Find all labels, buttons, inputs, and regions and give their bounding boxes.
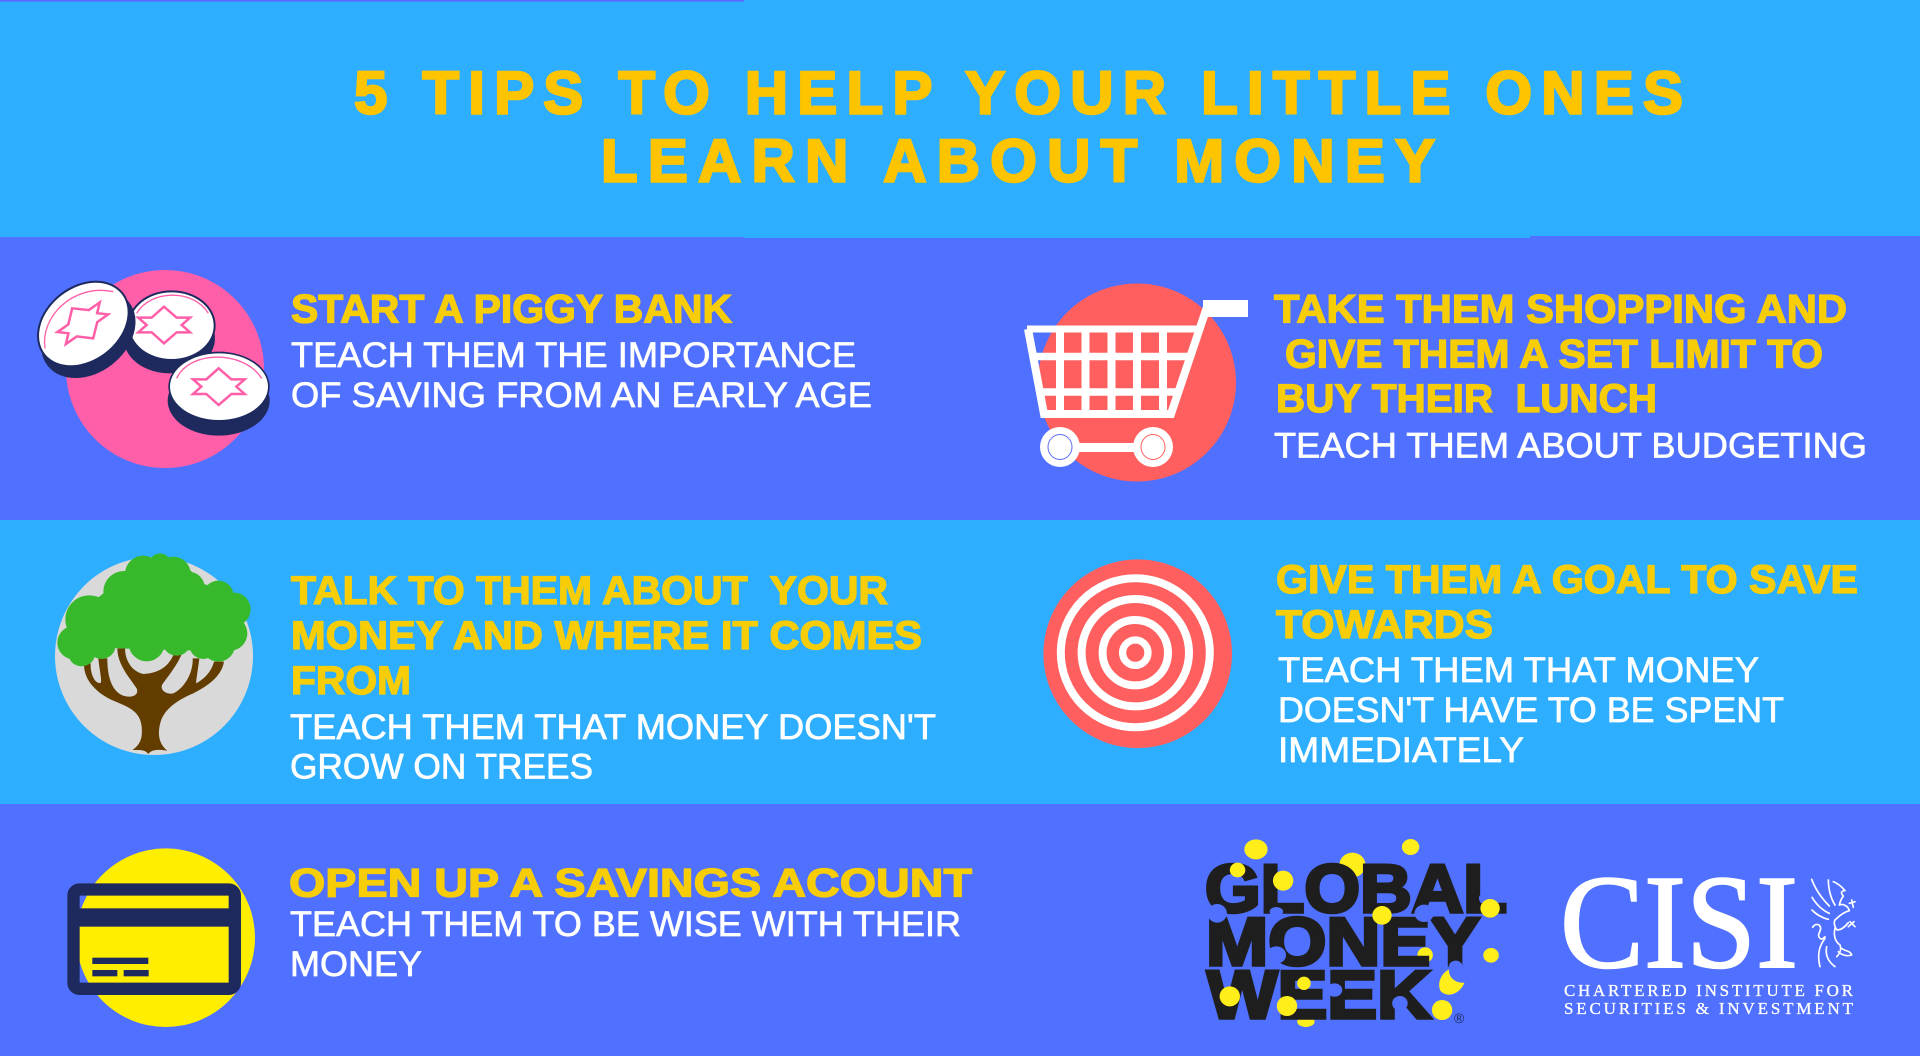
title: LEARN ABOUT MONEY [601, 128, 1435, 194]
text block: talk about money: GROW ON TREES [290, 746, 593, 786]
logo: global money week: MONEY [1206, 904, 1480, 980]
row 1 band [0, 236, 1920, 520]
logo: CISI: SECURITIES & INVESTMENT [1564, 999, 1854, 1018]
text block: talk about money: TEACH THEM THAT MONEY DOESN'T [290, 707, 936, 747]
logo: global money week [1205, 839, 1507, 1033]
text block: take them shopping: TEACH THEM ABOUT BUDGETING [1274, 426, 1867, 466]
text block: savings account [289, 862, 972, 984]
text block: give them a goal: GIVE THEM A GOAL TO SAVE [1276, 558, 1858, 602]
icon: tree [55, 553, 253, 755]
text block: start a piggy bank: START A PIGGY BANK [291, 288, 732, 332]
icon: shopping cart [1027, 284, 1248, 482]
text block: give them a goal: DOESN'T HAVE TO BE SPENT [1278, 690, 1784, 730]
text block: savings account: TEACH THEM TO BE WISE WITH THEIR [290, 904, 961, 944]
icon: target [1043, 559, 1232, 748]
text block: talk about money: MONEY AND WHERE IT COMES [291, 614, 922, 658]
logo: CISI: CHARTERED INSTITUTE FOR [1564, 981, 1854, 1000]
row 3 band [0, 804, 1920, 1056]
text block: talk about money: FROM [291, 659, 411, 703]
logo: CISI: CISI [1560, 848, 1798, 996]
text block: take them shopping: BUY THEIR LUNCH [1276, 377, 1657, 421]
logo: global money week: ® [1454, 1010, 1465, 1026]
logo: global money week: WEEK [1207, 957, 1431, 1033]
text block: take them shopping: GIVE THEM A SET LIMIT TO [1285, 332, 1823, 376]
title [354, 60, 1683, 194]
text block: give them a goal: TEACH THEM THAT MONEY [1278, 650, 1759, 690]
text block: talk about money [290, 569, 936, 786]
icon: griffin [1812, 879, 1855, 967]
icon: credit card [73, 848, 255, 1027]
header band [0, 0, 1920, 237]
text block: start a piggy bank: OF SAVING FROM AN EARLY AGE [291, 375, 872, 415]
text block: give them a goal: IMMEDIATELY [1278, 730, 1524, 770]
text block: take them shopping: TAKE THEM SHOPPING AND [1274, 288, 1847, 332]
text block: start a piggy bank [291, 288, 872, 415]
coin 3 [168, 352, 270, 436]
coin 2 [124, 290, 216, 373]
text block: savings account: OPEN UP A SAVINGS ACOUNT [289, 862, 972, 906]
coin 1 [20, 263, 153, 396]
text block: give them a goal: TOWARDS [1276, 603, 1493, 647]
text block: talk about money: TALK TO THEM ABOUT YOUR [291, 569, 888, 613]
icon: piggy bank coins [20, 263, 270, 468]
text block: savings account: MONEY [290, 944, 422, 984]
text block: start a piggy bank: TEACH THEM THE IMPORTANCE [291, 335, 856, 375]
text block: take them shopping [1274, 288, 1867, 466]
row 2 band [0, 520, 1920, 804]
text block: give them a goal [1276, 558, 1858, 770]
title: 5 TIPS TO HELP YOUR LITTLE ONES [354, 60, 1683, 126]
logo: global money week: GLOBAL [1205, 851, 1507, 927]
